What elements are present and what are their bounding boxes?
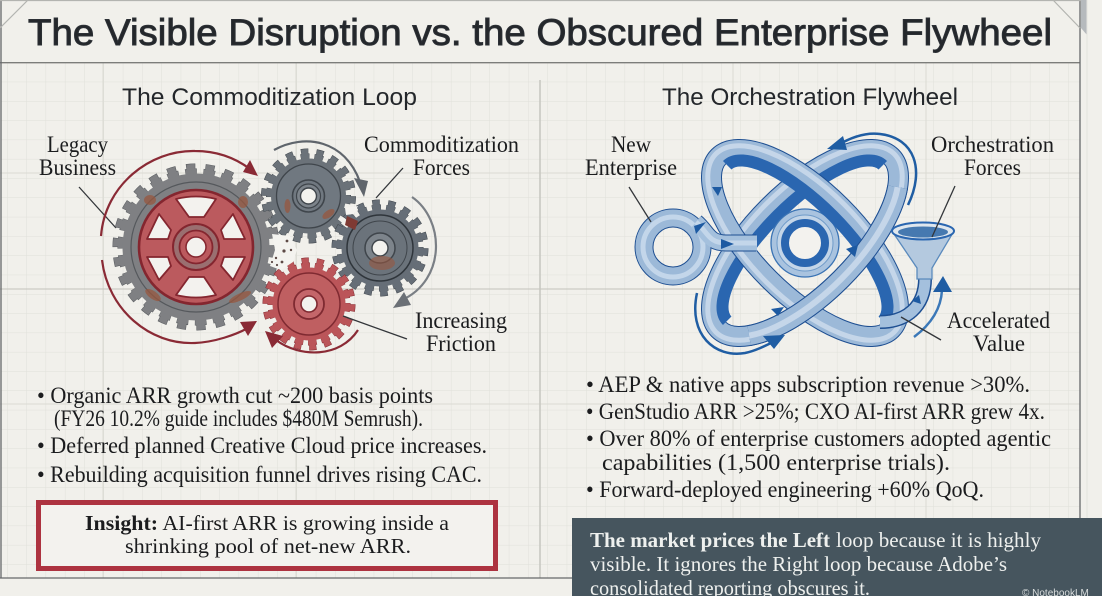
big arrow upper	[101, 151, 258, 236]
bullet list: commoditization: • Rebuilding acquisition funnel drives rising CAC.	[37, 462, 482, 487]
arrow: bottom left orbit	[695, 293, 785, 354]
bullet list: orchestration	[586, 372, 1051, 502]
label: commoditization forces: Forces	[413, 155, 470, 180]
label: accelerated value: Accelerated	[947, 308, 1050, 333]
label: commoditization forces	[364, 132, 519, 180]
leader line: legacy business	[79, 187, 116, 228]
gear diagram	[79, 141, 436, 352]
label: legacy business: Legacy	[47, 132, 108, 157]
leader line: accelerated value	[901, 317, 941, 340]
bullet list: orchestration: • AEP & native apps subscription revenue >30%.	[586, 372, 1030, 397]
arrow: top orbit	[827, 134, 916, 205]
title: The Visible Disruption vs. the Obscured Enterprise Flywheel	[28, 12, 1052, 53]
callout: insight: shrinking pool of net-new ARR.	[125, 534, 411, 558]
bullet list: commoditization	[37, 383, 487, 487]
input loop tube	[643, 217, 757, 277]
arrow: top grey gear	[274, 141, 368, 197]
label: accelerated value	[947, 308, 1050, 356]
callout: market takeaway: The market prices the Left	[590, 528, 831, 552]
bullet list: orchestration: • Forward-deployed engineering +60% QoQ.	[586, 477, 984, 502]
gear: friction red	[266, 261, 352, 347]
centre ring	[771, 209, 839, 277]
gear: right grey	[335, 203, 425, 293]
label: commoditization forces: Commoditization	[364, 132, 519, 157]
flywheel diagram	[629, 115, 955, 371]
label: new enterprise	[585, 132, 677, 180]
bullet list: commoditization: (FY26 10.2% guide includes $480M Semrush).	[54, 406, 423, 431]
leader line: increasing friction	[343, 316, 407, 339]
flow arrows	[694, 187, 921, 316]
leader line: new enterprise	[629, 187, 651, 222]
ring B front arc	[749, 187, 915, 353]
label: orchestration forces: Forces	[964, 155, 1021, 180]
label: new enterprise: New	[611, 132, 651, 157]
leader line: commoditization forces	[376, 168, 403, 198]
arrow: red gear	[265, 330, 358, 352]
label: increasing friction: Increasing	[415, 308, 507, 333]
ring B back	[677, 115, 933, 371]
spoke holes	[147, 196, 245, 298]
label: increasing friction: Friction	[426, 331, 496, 356]
heading: commoditization loop: The Commoditization Loop	[122, 84, 417, 111]
bullet list: orchestration: • Over 80% of enterprise customers adopted agentic	[586, 426, 1051, 451]
arrow: right orbit	[914, 276, 952, 337]
callout: insight: Insight: AI-first ARR is growing inside a	[85, 511, 449, 535]
arrow: right grey gear	[393, 197, 436, 308]
label: increasing friction	[415, 308, 507, 356]
bullet list: orchestration: capabilities (1,500 enterprise trials).	[602, 450, 950, 475]
label: accelerated value: Value	[973, 331, 1025, 356]
panel: commoditization loop	[37, 84, 519, 568]
callout: market takeaway: loop because it is highly	[836, 528, 1041, 552]
ring A	[677, 115, 933, 371]
bullet list: commoditization: • Organic ARR growth cut ~200 basis points	[37, 383, 433, 408]
callout: insight	[38, 502, 496, 568]
callout: market takeaway	[572, 518, 1102, 596]
label: new enterprise: Enterprise	[585, 155, 677, 180]
label: orchestration forces: Orchestration	[931, 132, 1054, 157]
label: legacy business	[39, 132, 116, 180]
bullet list: commoditization: • Deferred planned Creative Cloud price increases.	[37, 433, 487, 458]
broken teeth debris	[270, 206, 358, 270]
bullet list: orchestration: • GenStudio ARR >25%; CXO AI-first ARR grew 4x.	[586, 399, 1045, 424]
leader line: orchestration forces	[932, 186, 955, 237]
callout: market takeaway: visible. It ignores the Right loop because Adobe’s	[590, 552, 1007, 576]
gear: top grey	[264, 152, 352, 240]
big arrow lower	[102, 260, 257, 343]
heading: orchestration flywheel: The Orchestration Flywheel	[662, 84, 958, 111]
big legacy gear	[116, 167, 276, 327]
label: orchestration forces	[931, 132, 1054, 180]
label: legacy business: Business	[39, 155, 116, 180]
panel: orchestration flywheel	[585, 84, 1054, 502]
output funnel	[880, 222, 954, 322]
